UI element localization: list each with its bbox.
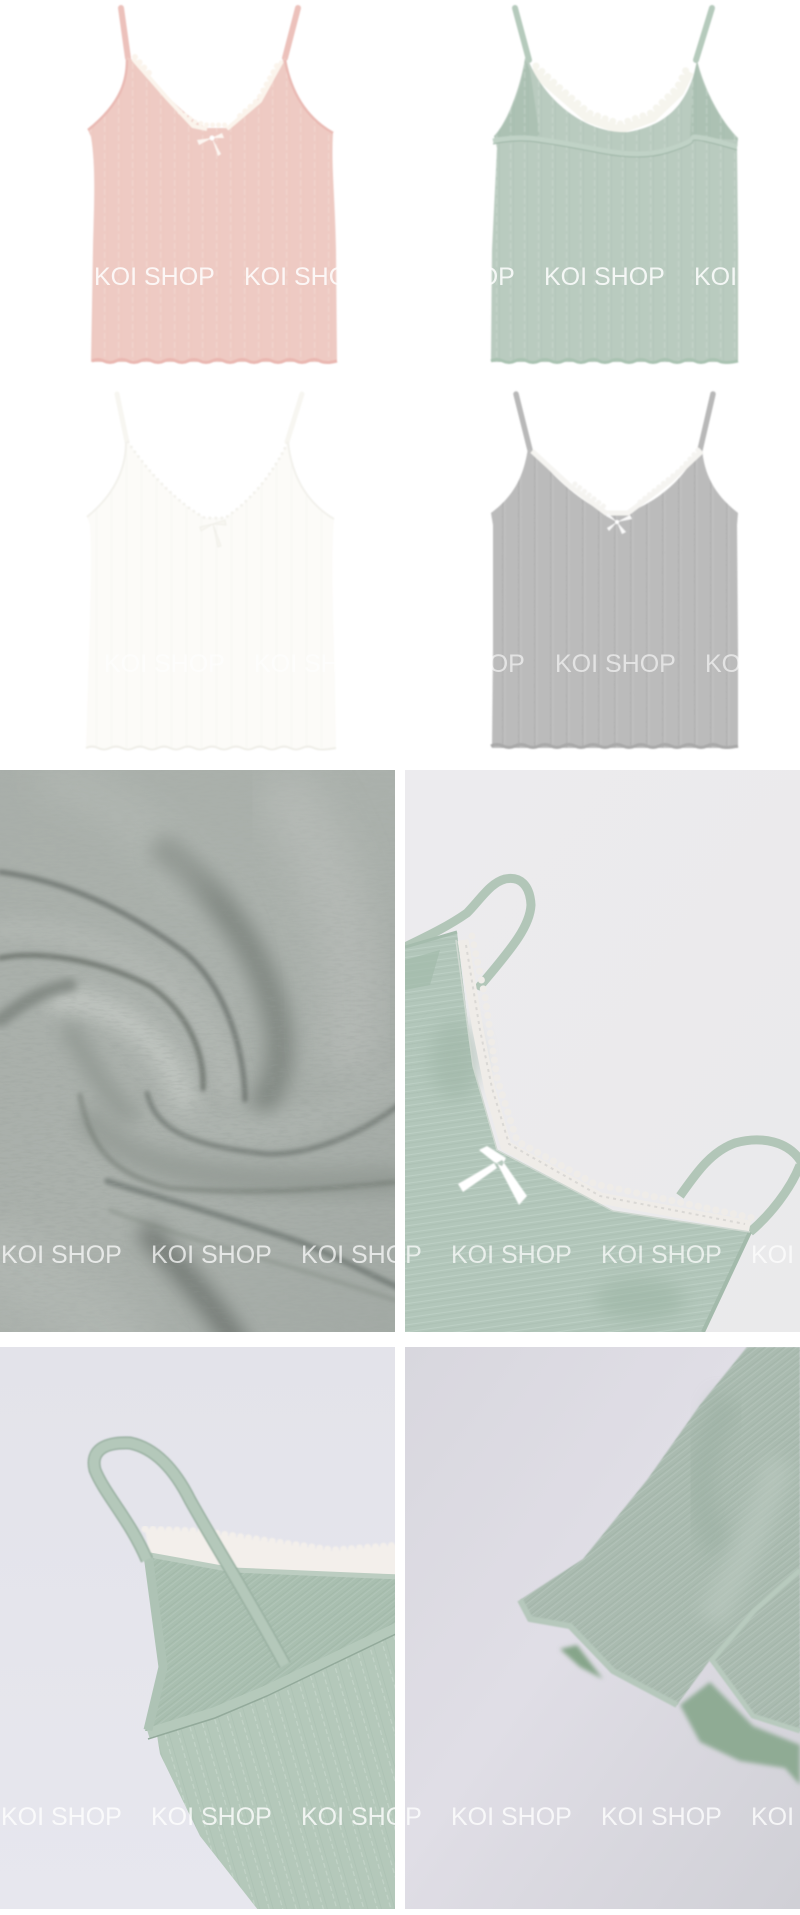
back band xyxy=(148,1626,400,1733)
watermark row: first garments: KOI SHOP xyxy=(544,263,665,291)
watermark row: second garments: KOI SHOP xyxy=(104,650,225,678)
panel: ruffled hem close-up xyxy=(405,1347,800,1909)
watermark row: second garments: KOI SHOP xyxy=(555,650,676,678)
panel: back strap close-up xyxy=(0,1347,400,1915)
watermark row: lower photos: KOI SHOP xyxy=(301,1803,422,1831)
watermark row: lower photos: KOI SHOP xyxy=(601,1803,722,1831)
watermark row: lower photos: KOI SHOP xyxy=(1,1803,122,1831)
fold lines xyxy=(0,872,400,1300)
watermark row: first garments xyxy=(94,263,800,291)
watermark row: first garments: KOI SHOP xyxy=(394,263,515,291)
icon: bow xyxy=(606,513,632,534)
panel: fabric swirl close-up xyxy=(0,770,400,1345)
product photo: gray camisole front xyxy=(491,394,738,748)
watermark row: upper photos: KOI SHOP xyxy=(451,1241,572,1269)
garment outer xyxy=(157,1626,400,1915)
watermark row: upper photos: KOI SHOP xyxy=(301,1241,422,1269)
lace neckline xyxy=(532,450,702,513)
icon: bow xyxy=(197,133,224,156)
watermark row: upper photos: KOI SHOP xyxy=(601,1241,722,1269)
watermark row: upper photos: KOI SHOP xyxy=(151,1241,272,1269)
lace trim xyxy=(142,1526,395,1574)
watermark row: lower photos: KOI SHOP xyxy=(151,1803,272,1831)
back hem layer xyxy=(680,1682,800,1785)
garment inner xyxy=(145,1555,400,1731)
garment body xyxy=(405,932,750,1332)
watermark row: lower photos xyxy=(1,1803,800,1831)
left strap loop xyxy=(405,878,531,986)
watermark row: upper photos xyxy=(1,1241,800,1269)
watermark row: second garments: KOI SHOP xyxy=(404,650,525,678)
icon: bow xyxy=(458,1146,527,1205)
product photo: green camisole back xyxy=(491,8,738,362)
watermark row: lower photos: KOI SHOP xyxy=(451,1803,572,1831)
watermark row: second garments xyxy=(104,650,800,678)
watermark row: upper photos: KOI SHOP xyxy=(1,1241,122,1269)
icon: bow xyxy=(200,520,226,547)
watermark row: second garments: KOI SHOP xyxy=(254,650,375,678)
product photo: white camisole front xyxy=(86,394,336,750)
product photo: pink camisole front xyxy=(88,8,337,362)
lace neckline xyxy=(133,57,282,129)
watermark row: first garments: KOI SHOP xyxy=(94,263,215,291)
large soft shading xyxy=(0,780,395,1345)
right strap loop xyxy=(680,1140,800,1196)
lace trim xyxy=(456,936,753,1232)
strap loop xyxy=(94,1443,285,1665)
panel: lace neckline close-up xyxy=(405,770,800,1332)
lace inner neckline xyxy=(532,66,690,130)
watermark row: first garments: KOI SHOP xyxy=(244,263,365,291)
front fabric xyxy=(520,1347,800,1731)
hem edge xyxy=(520,1600,677,1705)
fabric texture xyxy=(84,1003,182,1100)
